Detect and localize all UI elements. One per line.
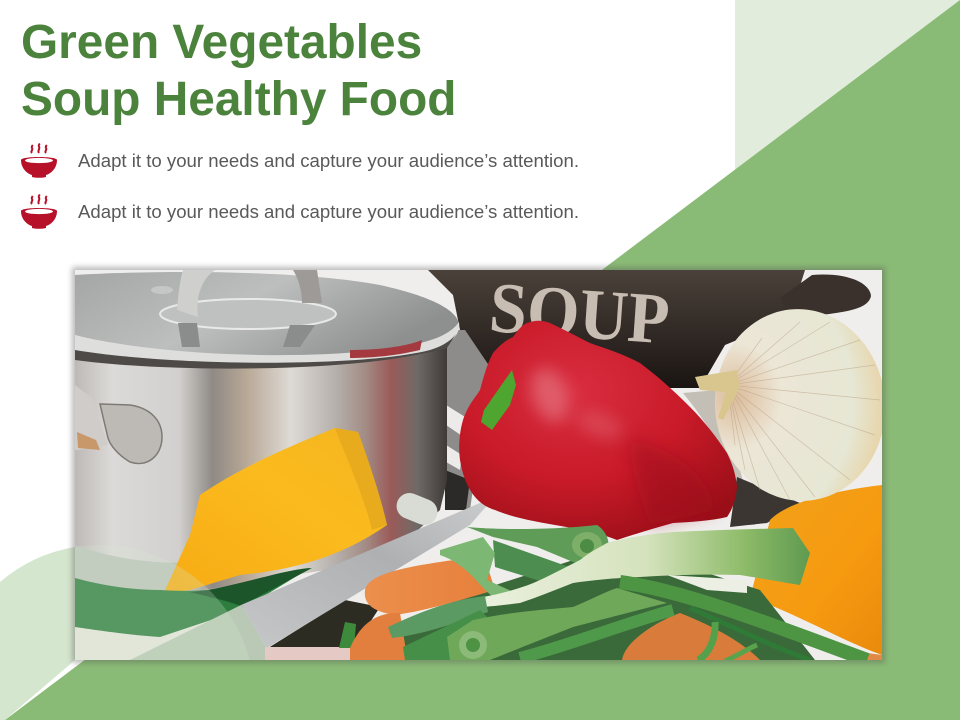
dark soup pot (428, 267, 871, 388)
carrot (365, 559, 495, 615)
photo shadow (72, 267, 885, 663)
carrot lower (350, 613, 407, 660)
icon: soup bowl (21, 144, 57, 178)
pot lettering: SOUP (487, 267, 672, 360)
side pot handle (75, 385, 162, 463)
pot lid (75, 272, 459, 359)
title (21, 16, 456, 126)
background: pale green block (735, 0, 960, 200)
shadow under knife (270, 600, 378, 647)
leeks, carrots and green beans (350, 525, 882, 661)
translucent circle over photo (75, 546, 228, 637)
second pot stand (445, 330, 490, 510)
zucchini (75, 568, 310, 637)
bullet one: Adapt it to your needs and capture your audience’s attention. (78, 150, 579, 171)
orange pepper (750, 485, 882, 655)
red bell pepper (459, 321, 737, 540)
bullet two (21, 194, 579, 229)
bullet one (21, 144, 579, 178)
icon: soup bowl (21, 194, 57, 229)
background: pale green circle (0, 547, 75, 720)
squash wedge (163, 428, 387, 595)
bullet two: Adapt it to your needs and capture your audience’s attention. (78, 201, 579, 222)
onion (695, 309, 882, 501)
white leek end (396, 493, 438, 525)
chopping board (75, 622, 206, 660)
title: Green Vegetables (21, 16, 422, 69)
steel pot body (75, 345, 447, 595)
title: Soup Healthy Food (21, 73, 456, 126)
cup behind pepper (683, 390, 755, 525)
knife handle (130, 605, 270, 660)
lid knob disc (160, 299, 336, 329)
photo: soup vegetables (75, 267, 895, 661)
knife blade (241, 502, 490, 648)
